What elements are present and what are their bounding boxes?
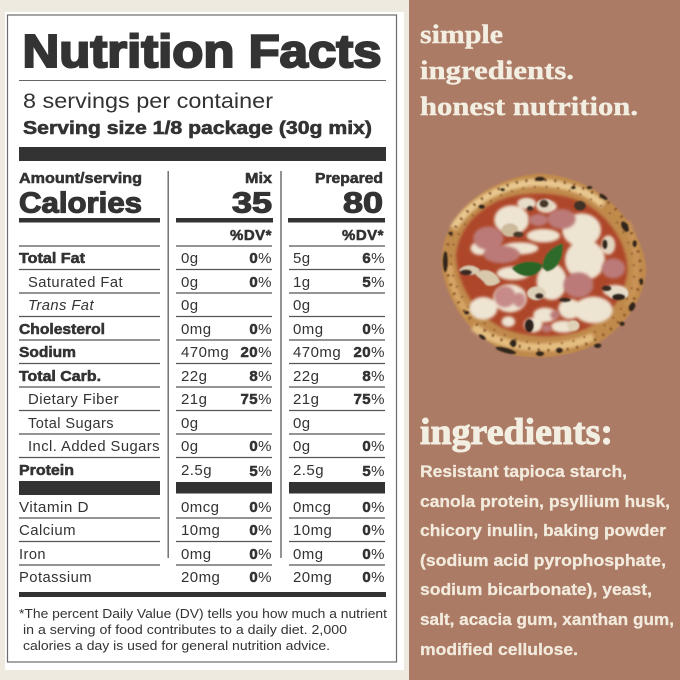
heading: simple ingredients honest nutrition: honest nutrition.	[420, 92, 638, 121]
row: vitamin d: 0%	[362, 499, 385, 516]
row: dietary fiber: 75%	[353, 391, 385, 408]
row: potassium: 20mg	[181, 569, 220, 586]
text: ingredient list: (sodium acid pyrophosphate,	[420, 551, 666, 570]
row: calcium: 0%	[362, 522, 385, 539]
row: vitamin d: 0mcg	[181, 499, 219, 516]
row: cholesterol: 0mg	[293, 321, 324, 338]
row: trans fat	[28, 297, 311, 314]
row: added sugars: 0g	[181, 438, 199, 455]
row: added sugars: Incl. Added Sugars	[28, 438, 160, 455]
row: vitamin d: 0mcg	[293, 499, 331, 516]
row: trans fat: Trans Fat	[28, 297, 94, 314]
text: ingredient list: chicory inulin, baking powder	[420, 521, 666, 540]
row: dietary fiber: 21g	[293, 391, 319, 408]
row: potassium: 0%	[249, 569, 272, 586]
row: added sugars	[28, 438, 385, 455]
row: vitamin d: Vitamin D	[19, 499, 89, 516]
row: sodium: 470mg	[293, 344, 341, 361]
row: iron: 0mg	[293, 546, 324, 563]
row: iron: 0%	[362, 546, 385, 563]
footnote: calories a day is used for general nutrition advice.	[23, 639, 330, 653]
row: protein: Protein	[19, 462, 74, 479]
header: amount per serving: Prepared	[315, 170, 383, 187]
basil leaves	[512, 243, 563, 276]
header: amount per serving	[19, 170, 383, 187]
row: total sugars	[28, 415, 311, 432]
row: total sugars: Total Sugars	[28, 415, 114, 432]
text: ingredient list: salt, acacia gum, xanthan gum,	[420, 610, 674, 629]
row: protein: 2.5g	[181, 462, 212, 479]
crust browning	[446, 180, 641, 350]
row: iron: 0mg	[181, 546, 212, 563]
row: calcium: Calcium	[19, 522, 76, 539]
footnote: *The percent Daily Value (DV) tells you how much a nutrient	[19, 607, 388, 621]
ham slices	[473, 209, 625, 332]
row: potassium: Potassium	[19, 569, 92, 586]
row: dietary fiber: 21g	[181, 391, 207, 408]
panel: brown ingredients background	[409, 0, 680, 680]
row: total fat: 0g	[181, 250, 199, 267]
row: vitamin d: 0%	[249, 499, 272, 516]
row: added sugars: 0%	[362, 438, 385, 455]
image: pizza	[442, 174, 646, 357]
heading: simple ingredients honest nutrition: simple	[420, 20, 503, 49]
text: ingredient list: modified cellulose.	[420, 640, 578, 659]
calories row: Calories	[19, 188, 142, 220]
row: trans fat: 0g	[293, 297, 311, 314]
row: dietary fiber: 75%	[240, 391, 272, 408]
row: added sugars: 0g	[293, 438, 311, 455]
calories row: 35	[232, 188, 272, 220]
row: potassium	[19, 569, 385, 586]
char spots	[443, 177, 643, 356]
row: dietary fiber	[28, 391, 385, 408]
title: Nutrition Facts: Nutrition Facts	[22, 25, 382, 77]
sauce	[456, 194, 627, 336]
row: total carb: 22g	[293, 368, 319, 385]
heading: simple ingredients honest nutrition: ingredients.	[420, 56, 574, 85]
calories row: 80	[343, 188, 383, 220]
row: protein: 2.5g	[293, 462, 324, 479]
header: percent daily value: %DV*	[230, 227, 272, 244]
text: serving size: Serving size 1/8 package (30g mix)	[23, 117, 372, 138]
row: potassium: 20mg	[293, 569, 332, 586]
calories row	[19, 188, 385, 222]
row: cholesterol: 0%	[362, 321, 385, 338]
row: iron	[19, 546, 385, 563]
mozzarella	[469, 198, 627, 333]
row: sodium: Sodium	[19, 344, 76, 361]
text: ingredient list: Resistant tapioca starch,	[420, 462, 627, 481]
row: total carb: 8%	[362, 368, 385, 385]
row: cholesterol: 0%	[249, 321, 272, 338]
row: sodium: 470mg	[181, 344, 229, 361]
header: amount per serving: Mix	[245, 170, 273, 187]
mushrooms	[459, 199, 628, 332]
row: saturated fat	[28, 274, 385, 291]
row: saturated fat: 0%	[249, 274, 272, 291]
row: saturated fat: Saturated Fat	[28, 274, 123, 291]
footnote: in a serving of food contributes to a daily diet. 2,000	[23, 623, 347, 637]
row: saturated fat: 0g	[181, 274, 199, 291]
row: sodium	[19, 344, 385, 361]
text: servings per container: 8 servings per container	[23, 90, 273, 113]
row lines	[19, 246, 385, 565]
text: ingredient list	[420, 462, 674, 659]
heading: simple ingredients honest nutrition	[420, 20, 638, 121]
row: calcium: 10mg	[181, 522, 220, 539]
row: total carb: 22g	[181, 368, 207, 385]
header: percent daily value	[230, 227, 384, 244]
row: cholesterol	[19, 321, 385, 338]
row: saturated fat: 1g	[293, 274, 311, 291]
header: amount per serving: Amount/serving	[19, 170, 142, 187]
row: iron: 0%	[249, 546, 272, 563]
row: total fat	[19, 250, 385, 267]
row: total fat: 0%	[249, 250, 272, 267]
row: total carb: 8%	[249, 368, 272, 385]
row: protein	[19, 462, 385, 480]
row: total fat: 5g	[293, 250, 311, 267]
row: protein: 5%	[249, 463, 272, 480]
row: saturated fat: 5%	[362, 274, 385, 291]
footnote	[19, 607, 388, 653]
row: vitamin d	[19, 499, 385, 516]
row: trans fat: 0g	[181, 297, 199, 314]
row: calcium: 0%	[249, 522, 272, 539]
row: calcium: 10mg	[293, 522, 332, 539]
header: percent daily value: %DV*	[342, 227, 384, 244]
column dividers	[168, 171, 282, 558]
row: total fat: Total Fat	[19, 250, 85, 267]
row: iron: Iron	[19, 546, 46, 563]
row: added sugars: 0%	[249, 438, 272, 455]
row: total carb	[19, 368, 385, 385]
row: sodium: 20%	[240, 344, 272, 361]
row: total carb: Total Carb.	[19, 368, 101, 385]
heading: ingredients: ingredients:	[420, 412, 613, 453]
text: ingredient list: sodium bicarbonate), yeast,	[420, 580, 652, 599]
row: cholesterol: 0mg	[181, 321, 212, 338]
text: ingredient list: canola protein, psyllium husk,	[420, 492, 670, 511]
row: total sugars: 0g	[293, 415, 311, 432]
row: protein: 5%	[362, 463, 385, 480]
row: total fat: 6%	[362, 250, 385, 267]
row: dietary fiber: Dietary Fiber	[28, 391, 119, 408]
crust	[442, 174, 646, 357]
row: total sugars: 0g	[181, 415, 199, 432]
row: sodium: 20%	[353, 344, 385, 361]
panel: nutrition facts label	[5, 12, 404, 670]
row: potassium: 0%	[362, 569, 385, 586]
row: cholesterol: Cholesterol	[19, 321, 105, 338]
black separator bars	[19, 481, 385, 495]
row: calcium	[19, 522, 385, 539]
